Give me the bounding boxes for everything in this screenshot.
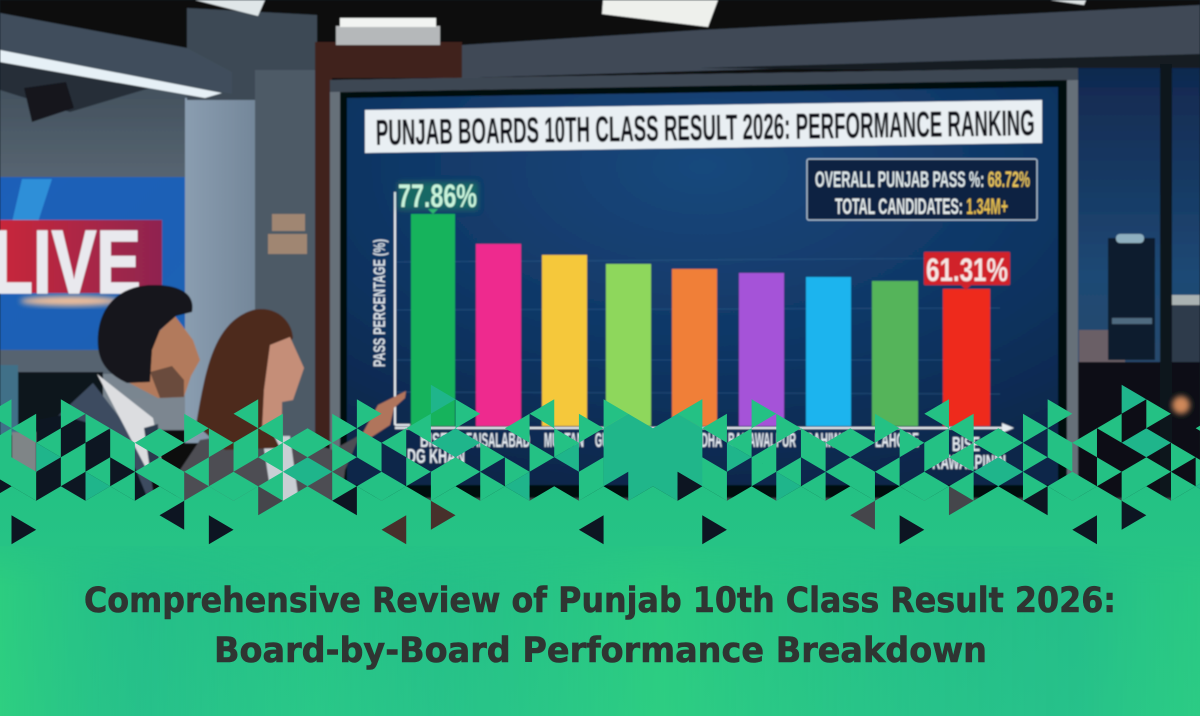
night window with city skyline: [1078, 64, 1200, 514]
left wall: [0, 70, 190, 430]
board labels: LAHORE: [875, 430, 919, 452]
triangle grid: [0, 385, 1200, 716]
ceiling lights: [195, 0, 1086, 45]
console below screen: [330, 498, 1200, 516]
lighter cut-out triangles: [258, 486, 974, 530]
woman presenter: [170, 309, 406, 550]
mottled colour wash: [0, 585, 1076, 716]
main title: [84, 581, 1116, 671]
ceiling beam: [0, 13, 232, 94]
board labels: RAWALPINDI: [932, 452, 1006, 474]
lowest value label: 61.31%: [926, 252, 1008, 288]
board labels: FAISALABAD: [466, 430, 530, 452]
overlapping hexagon: teal body: [604, 414, 702, 501]
hair: [98, 285, 193, 383]
grid lines: [395, 258, 1000, 394]
solid lower band: [0, 486, 1200, 716]
pointing hand: [360, 391, 406, 438]
top value label: 77.86%: [398, 178, 477, 214]
screen bezel: [330, 68, 1078, 498]
board labels: SARGODHA: [665, 430, 722, 452]
top right beam: [462, 5, 1200, 78]
dark band under beam: [700, 54, 1200, 72]
tie: [144, 424, 160, 470]
axis arrowhead: [1002, 423, 1014, 433]
board labels: BAHAWALPUR: [728, 430, 796, 452]
neck and face: [120, 316, 200, 398]
wall sign: [268, 214, 307, 254]
summary stats box: [807, 159, 1037, 220]
dark soffit under light: [0, 60, 150, 112]
bar chart: [411, 214, 990, 426]
green scattered triangles: [0, 385, 604, 501]
main title: Comprehensive Review of Punjab 10th Class Result 2026:: [84, 581, 1116, 621]
man presenter: [36, 285, 200, 540]
grey pillar: [185, 98, 255, 443]
board labels: MULTAN: [544, 430, 584, 452]
beard shading: [150, 366, 184, 398]
hair: [196, 309, 293, 450]
board labels: [407, 430, 1006, 474]
brown column: [315, 42, 462, 445]
suit: [40, 383, 160, 540]
ceiling light strip: [0, 50, 222, 98]
upper wall block: [187, 8, 317, 100]
lower-left monitor desk: [0, 365, 103, 472]
board labels: GUJRANWALA: [595, 430, 661, 452]
y axis label: PASS PERCENTAGE (%): [370, 239, 389, 367]
wall below TV: [0, 350, 185, 374]
shirt: [97, 374, 165, 480]
left studio screen: LIVE: [0, 177, 185, 350]
blouse: [262, 436, 300, 520]
board labels: BISE: [420, 430, 448, 452]
board labels: SAHIWAL: [806, 430, 854, 452]
axes: [395, 192, 1006, 428]
dark cut-out triangles: [0, 472, 1146, 544]
green triangle mosaic footer: [0, 385, 1200, 716]
main wall screen: [330, 68, 1200, 516]
summary stats box: OVERALL PUNJAB PASS %: 68.72%: [815, 167, 1030, 192]
jacket: [170, 430, 360, 550]
screen panel: [347, 87, 1058, 485]
dark lower suit: [36, 415, 165, 540]
right wall panel: [255, 70, 315, 445]
overlapping hexagon: green top: [604, 399, 702, 428]
brown cut-out triangles: [382, 501, 456, 544]
board labels: BISE: [952, 434, 980, 456]
studio camera fixture: [24, 82, 74, 122]
summary stats box: TOTAL CANDIDATES: 1.34M+: [835, 194, 1008, 219]
face and neck: [262, 337, 304, 436]
teal accent triangles: [36, 385, 579, 501]
main title: Board-by-Board Performance Breakdown: [214, 631, 987, 671]
repeat of triangle pattern: [678, 385, 1200, 501]
board labels: DG KHAN: [407, 446, 465, 468]
